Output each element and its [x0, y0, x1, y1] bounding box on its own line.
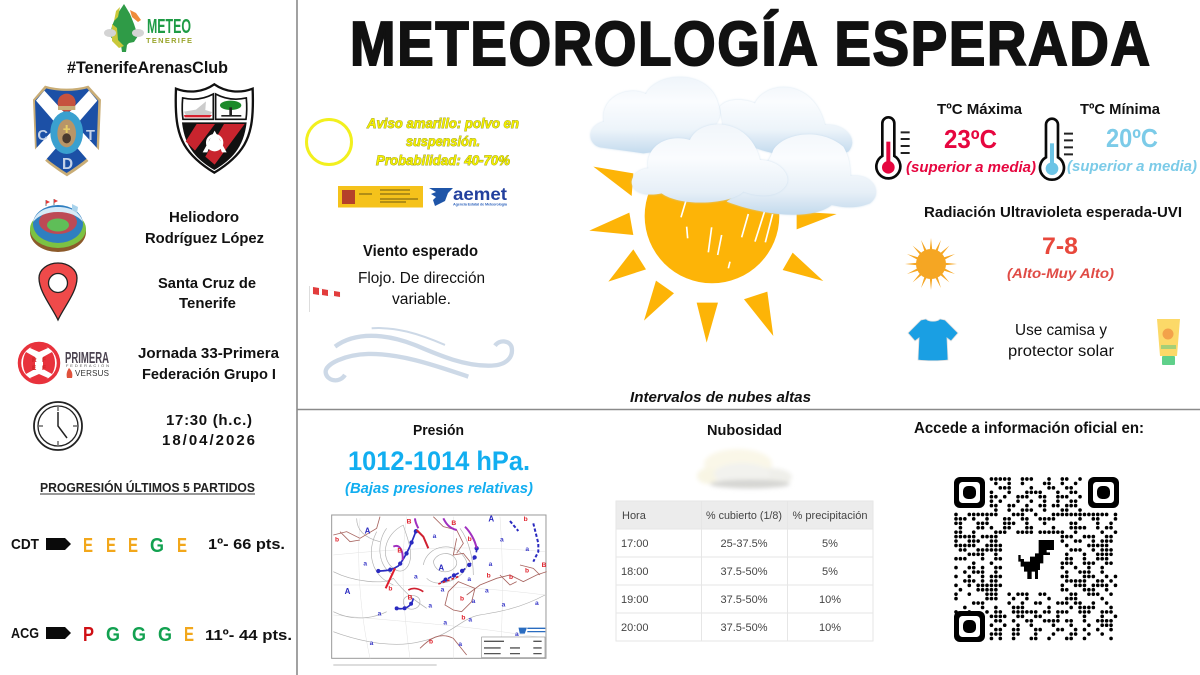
stadium name: Rodríguez López	[145, 230, 264, 247]
city: Santa Cruz de	[158, 275, 256, 292]
stadium name: Heliodoro	[169, 209, 239, 226]
maximum temperature: TºC Máxima	[937, 101, 1023, 118]
icon: yellow warning circle	[306, 120, 352, 164]
pressure labels: A	[488, 515, 494, 524]
pressure labels: b	[429, 638, 433, 645]
table: hourly cloud cover and precipitation: 37.5-50%	[720, 594, 768, 606]
form row: CDT: CDT	[11, 536, 39, 553]
fronts	[378, 518, 538, 609]
logo: AEMET: aemet	[453, 184, 507, 204]
competition	[138, 345, 280, 383]
pressure labels: b	[460, 596, 464, 603]
logo: Arenas Club shield	[176, 84, 253, 173]
pressure labels: A	[365, 526, 371, 535]
pressure labels: a	[378, 611, 382, 618]
logo: CD Tenerife shield: C	[37, 128, 48, 144]
logo: AEMET	[429, 184, 508, 206]
pressure labels: a	[467, 576, 471, 583]
minimum temperature: 20ºC	[1106, 123, 1158, 153]
icon: location pin	[39, 263, 77, 320]
table: hourly cloud cover and precipitation: % precipitación	[792, 510, 868, 522]
pressure labels: a	[370, 640, 374, 647]
minimum temperature	[1067, 101, 1197, 175]
icon: blue thermometer	[1040, 119, 1073, 180]
table: hourly cloud cover and precipitation: 25-37.5%	[720, 538, 768, 550]
table: hourly cloud cover and precipitation: % cubierto (1/8)	[706, 510, 782, 522]
pressure note: (Bajas presiones relativas)	[345, 481, 533, 497]
warning text	[366, 115, 519, 168]
pressure labels: B	[407, 518, 412, 525]
warning text: Probabilidad: 40-70%	[376, 152, 511, 168]
form row: ACG: ACG	[11, 625, 39, 642]
panel: official information QR	[914, 420, 1144, 642]
wind description	[358, 270, 485, 308]
pressure labels	[335, 515, 547, 648]
logo: CD Tenerife shield	[33, 86, 101, 176]
logo: Primera Federación RFEF	[20, 344, 109, 382]
kickoff time and date	[162, 412, 255, 449]
logo: Primera Federación RFEF: VERSUS	[75, 369, 109, 378]
UVI value: 7-8	[1042, 233, 1078, 260]
table: hourly cloud cover and precipitation: 17:00	[621, 538, 649, 550]
pressure labels: a	[472, 598, 476, 605]
pressure labels: a	[489, 561, 493, 568]
icon: sunscreen	[1157, 319, 1180, 365]
table: hourly cloud cover and precipitation: 37.5-50%	[720, 622, 768, 634]
logo: Meteo Tenerife: TENERIFE	[146, 36, 192, 45]
pressure value: 1012-1014 hPa.	[348, 446, 530, 476]
minimum temperature: TºC Mínima	[1080, 101, 1161, 118]
form row: ACG: P	[83, 624, 94, 646]
city	[158, 275, 256, 312]
form row: ACG: 11º- 44 pts.	[205, 627, 292, 644]
logo: AEMET: Agencia Estatal de Meteorología	[453, 202, 508, 206]
pressure labels: b	[509, 574, 513, 581]
pressure labels: a	[502, 602, 506, 609]
pressure labels: a	[441, 586, 445, 593]
icon: t-shirt	[908, 319, 958, 361]
form row: CDT: G	[150, 535, 164, 557]
logo: CD Tenerife shield: D	[62, 156, 73, 173]
icon: stadium	[30, 199, 86, 252]
finder patterns	[954, 477, 1119, 642]
heading: wind: Viento esperado	[363, 243, 478, 260]
pressure labels: a	[428, 602, 432, 609]
logo: Primera Federación RFEF: FEDERACIÓN	[66, 363, 109, 368]
form row: ACG: E	[184, 624, 194, 646]
pressure labels: a	[458, 641, 462, 648]
logo: Meteo Tenerife: METEO	[147, 16, 191, 38]
logo: Primera Federación RFEF: EF	[32, 365, 46, 372]
competition: Federación Grupo I	[142, 366, 276, 383]
warning text: suspensión.	[406, 133, 480, 149]
heading: UVI: Radiación Ultravioleta esperada-UVI	[924, 204, 1182, 221]
pressure labels: a	[535, 600, 539, 607]
wind description: Flojo. De dirección	[358, 270, 485, 287]
panel: temperature	[876, 101, 1197, 180]
chart: isobar map	[332, 515, 547, 665]
heading: recent form: PROGRESIÓN ÚLTIMOS 5 PARTIDOS	[40, 480, 255, 495]
maximum temperature	[906, 101, 1036, 176]
pressure labels: b	[468, 536, 472, 543]
maximum temperature: 23ºC	[944, 124, 997, 154]
logo: Gobierno de España	[338, 186, 423, 208]
city: Tenerife	[179, 295, 236, 312]
pressure labels: a	[433, 533, 437, 540]
minimum temperature: (superior a media)	[1067, 159, 1197, 175]
kickoff time and date: 17:30 (h.c.)	[166, 412, 252, 429]
pressure labels: a	[525, 546, 529, 553]
form row: ACG: G	[158, 624, 172, 646]
icon: sun burst	[905, 238, 957, 290]
table: hourly cloud cover and precipitation: 5%	[822, 538, 838, 550]
table: hourly cloud cover and precipitation: 20:00	[621, 622, 649, 634]
UVI level: (Alto-Muy Alto)	[1007, 265, 1114, 281]
caption: sky condition: Intervalos de nubes altas	[630, 390, 811, 406]
heading: pressure: Presión	[413, 422, 464, 439]
kickoff time and date: 18/04/2026	[162, 432, 255, 449]
pressure labels: b	[461, 614, 465, 621]
icon: red thermometer	[876, 117, 910, 178]
pressure labels: b	[388, 585, 392, 592]
panel: pressure	[332, 422, 547, 665]
panel: cloud cover	[616, 422, 873, 641]
form row: ACG: G	[106, 624, 120, 646]
form row: ACG: G	[132, 624, 146, 646]
pressure labels: a	[500, 537, 504, 544]
table: hourly cloud cover and precipitation: 37.5-50%	[720, 566, 768, 578]
map legend	[482, 628, 545, 658]
pressure labels: A	[438, 563, 444, 572]
pressure labels: a	[515, 631, 519, 638]
pressure labels: a	[468, 617, 472, 624]
form row: CDT: 1º- 66 pts.	[208, 536, 285, 553]
competition: Jornada 33-Primera	[138, 345, 280, 362]
table: hourly cloud cover and precipitation: 10%	[819, 594, 841, 606]
warning text: Aviso amarillo: polvo en	[366, 115, 519, 131]
pressure labels: b	[335, 537, 339, 544]
form row: CDT: E	[177, 535, 187, 557]
pressure labels: a	[443, 619, 447, 626]
stadium name	[145, 209, 264, 247]
form row: CDT: E	[106, 535, 116, 557]
icon: dinosaur	[1018, 540, 1054, 579]
heading: QR: Accede a información oficial en:	[914, 420, 1144, 437]
panel: match sidebar	[11, 4, 292, 646]
arrow	[46, 538, 71, 550]
pressure labels: B	[451, 520, 456, 527]
QR code	[954, 477, 1119, 642]
panel: ultraviolet radiation	[905, 204, 1182, 365]
logo: Primera Federación RFEF: RF	[32, 357, 46, 364]
hashtag: #TenerifeArenasClub	[67, 59, 228, 77]
icon: windsock	[310, 286, 340, 312]
logo: Primera Federación RFEF: PRIMERA	[65, 350, 109, 367]
clouds	[590, 77, 876, 215]
pressure labels: b	[524, 516, 528, 523]
panel: yellow warning	[306, 115, 519, 208]
table: hourly cloud cover and precipitation: 19:00	[621, 594, 649, 606]
title: METEOROLOGÍA ESPERADA	[350, 9, 1150, 79]
pressure labels: B	[408, 594, 413, 601]
table: hourly cloud cover and precipitation: 5%	[822, 566, 838, 578]
sun protection advice: Use camisa y	[1015, 322, 1107, 339]
table: hourly cloud cover and precipitation: Hora	[622, 510, 647, 522]
pressure labels: B	[542, 562, 547, 569]
logo: Meteo Tenerife	[104, 4, 192, 52]
arrow	[46, 627, 71, 639]
coastlines and isobars	[333, 517, 547, 658]
wind description: variable.	[392, 291, 451, 308]
pressure labels: b	[525, 568, 529, 575]
pressure labels: A	[345, 587, 351, 596]
pressure labels: a	[414, 574, 418, 581]
icon: wind swirls	[326, 328, 512, 380]
form row: CDT: E	[128, 535, 138, 557]
icon: clock	[34, 402, 82, 450]
pressure labels: B	[397, 547, 402, 554]
form row: ACG	[11, 624, 292, 646]
sun protection advice	[1008, 322, 1114, 360]
sun protection advice: protector solar	[1008, 343, 1114, 360]
table: hourly cloud cover and precipitation	[616, 501, 873, 641]
logo: CD Tenerife shield: T	[86, 128, 95, 144]
maximum temperature: (superior a media)	[906, 160, 1036, 176]
table: hourly cloud cover and precipitation: 18:00	[621, 566, 649, 578]
pressure labels: b	[487, 573, 491, 580]
table: hourly cloud cover and precipitation: 10%	[819, 622, 841, 634]
form row: CDT	[11, 535, 285, 557]
form row: CDT: E	[83, 535, 93, 557]
pressure labels: a	[485, 588, 489, 595]
illustration: sun behind clouds	[589, 77, 876, 343]
pressure labels: a	[363, 561, 367, 568]
icon: cloud	[697, 449, 792, 488]
panel: wind	[310, 243, 512, 380]
sun	[589, 149, 837, 343]
heading: cloud cover: Nubosidad	[707, 422, 782, 439]
